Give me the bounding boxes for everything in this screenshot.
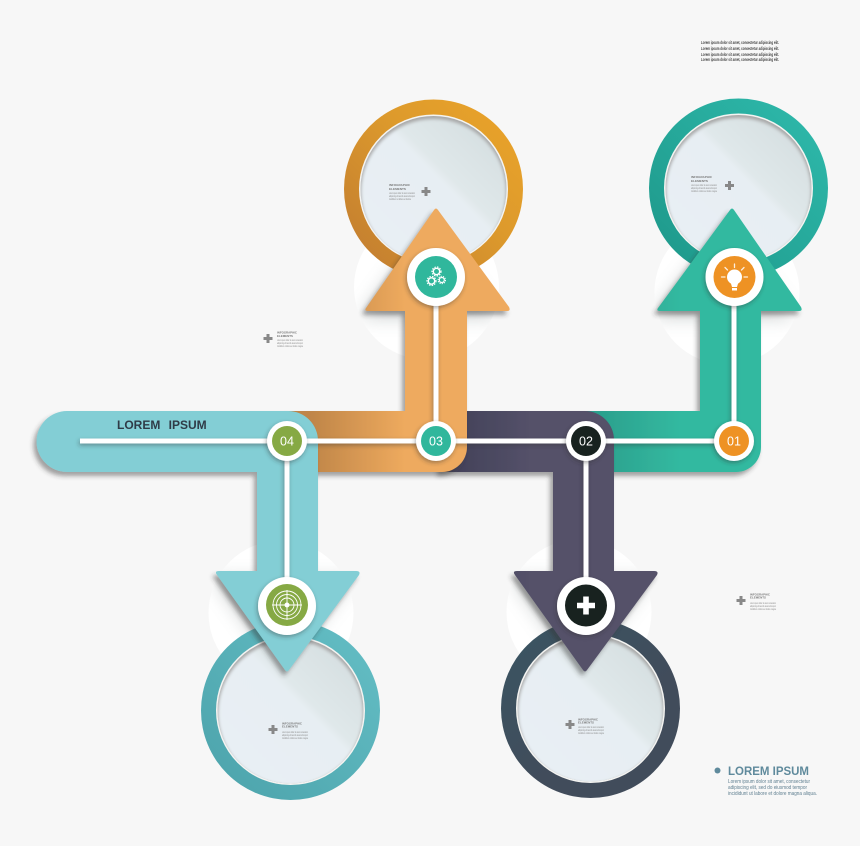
ring: dark	[501, 619, 680, 798]
mini label: dark ring: INFOGRAPHIC	[578, 718, 599, 722]
white halo: blue arrow	[218, 584, 255, 632]
mini label: teal ring: INFOGRAPHIC	[691, 175, 713, 179]
ring: light blue	[201, 621, 380, 800]
bottom right callout: LOREM IPSUM	[728, 764, 809, 778]
mini label: orange ring: adipiscing elit sed do eiusmod tempor	[389, 194, 415, 198]
step 01 node	[714, 421, 754, 461]
mini label: orange ring: incididunt ut labore et dolore	[389, 197, 411, 201]
step 03 node: 03	[429, 434, 443, 448]
icon: target	[258, 577, 316, 635]
mini label: middle left: INFOGRAPHIC	[277, 330, 298, 334]
bottom right callout: incididunt ut labore et dolore magna aliqua.	[728, 791, 817, 797]
mini label: middle left: incididunt ut labore et dolore magna	[277, 344, 303, 348]
bottom right callout: adipiscing elit, sed do eiusmod tempor	[728, 785, 807, 791]
ring: teal	[649, 98, 828, 278]
step 02 node	[566, 421, 606, 461]
heading: lorem ipsum on band: LOREM IPSUM	[117, 418, 207, 432]
step 04 node: 04	[280, 434, 294, 448]
mini label: middle left	[264, 330, 303, 348]
mini label: middle right: Lorem ipsum dolor sit amet consectetur	[750, 601, 776, 605]
icon: gears	[407, 248, 465, 306]
top caption text: Lorem ipsum dolor sit amet, consectetur adipiscing elit.	[701, 46, 779, 51]
bottom right callout: Lorem ipsum dolor sit amet, consectetur	[728, 779, 810, 785]
mini label: teal ring: Lorem ipsum dolor sit amet consectetur	[691, 183, 717, 187]
mini label: orange ring: Lorem ipsum dolor sit amet consectetur	[389, 191, 415, 195]
step 01 node: 01	[727, 434, 741, 448]
mini label: middle left: ELEMENTS	[277, 334, 293, 338]
mini label: blue ring: adipiscing elit sed do eiusmod tempor	[282, 733, 308, 737]
mini label: teal ring: ELEMENTS	[691, 179, 708, 183]
white halo: dark arrow	[516, 584, 552, 631]
mini label: middle left: Lorem ipsum dolor sit amet consectetur	[277, 338, 303, 342]
top caption text: Lorem ipsum dolor sit amet, consectetur adipiscing elit.	[701, 57, 779, 62]
white halo: orange arrow	[368, 270, 490, 322]
mini label: middle right: adipiscing elit sed do eiusmod tempor	[750, 604, 776, 608]
bottom right callout	[714, 764, 817, 797]
mini label: blue ring	[268, 722, 308, 740]
mini label: dark ring: ELEMENTS	[578, 720, 594, 724]
mini label: dark ring: adipiscing elit sed do eiusmod tempor	[578, 728, 604, 732]
mini label: orange ring	[389, 183, 430, 201]
mini label: teal ring: incididunt ut labore et dolore magna	[691, 189, 717, 193]
mini label: middle right	[736, 592, 776, 611]
mini label: dark ring	[566, 718, 604, 735]
top caption text: Lorem ipsum dolor sit amet, consectetur adipiscing elit.	[701, 52, 779, 57]
icon: light bulb	[706, 248, 764, 306]
step 04 node	[267, 421, 307, 461]
timeline connector lines	[80, 277, 736, 606]
arrow: light blue down	[37, 411, 360, 672]
mini label: blue ring: ELEMENTS	[282, 724, 298, 728]
step 03 node	[416, 421, 456, 461]
mini label: middle left: adipiscing elit sed do eiusmod tempor	[277, 341, 303, 345]
mini label: middle right: incididunt ut labore et dolore magna	[750, 607, 776, 611]
mini label: orange ring: ELEMENTS	[389, 187, 406, 191]
mini label: dark ring: incididunt ut labore et dolore magna	[578, 731, 604, 735]
white halo: teal arrow	[660, 276, 786, 322]
mini label: middle right: INFOGRAPHIC	[750, 592, 771, 596]
arrow: dark down	[440, 411, 658, 672]
mini label: blue ring: incididunt ut labore et dolore magna	[282, 736, 308, 740]
mini label: dark ring: Lorem ipsum dolor sit amet consectetur	[578, 725, 604, 729]
ring: orange	[344, 100, 523, 278]
mini label: blue ring: Lorem ipsum dolor sit amet consectetur	[282, 730, 308, 734]
arrow: orange up	[285, 208, 510, 472]
mini label: teal ring	[691, 175, 734, 193]
icon: plus	[557, 577, 615, 635]
mini label: blue ring: INFOGRAPHIC	[282, 722, 303, 726]
mini label: teal ring: adipiscing elit sed do eiusmod tempor	[691, 186, 717, 190]
arrow: teal up	[560, 208, 802, 472]
mini label: orange ring: INFOGRAPHIC	[389, 183, 411, 187]
mini label: middle right: ELEMENTS	[750, 596, 766, 600]
step 02 node: 02	[579, 434, 593, 448]
top caption text: Lorem ipsum dolor sit amet, consectetur adipiscing elit.	[701, 40, 779, 45]
top caption text	[701, 40, 779, 62]
